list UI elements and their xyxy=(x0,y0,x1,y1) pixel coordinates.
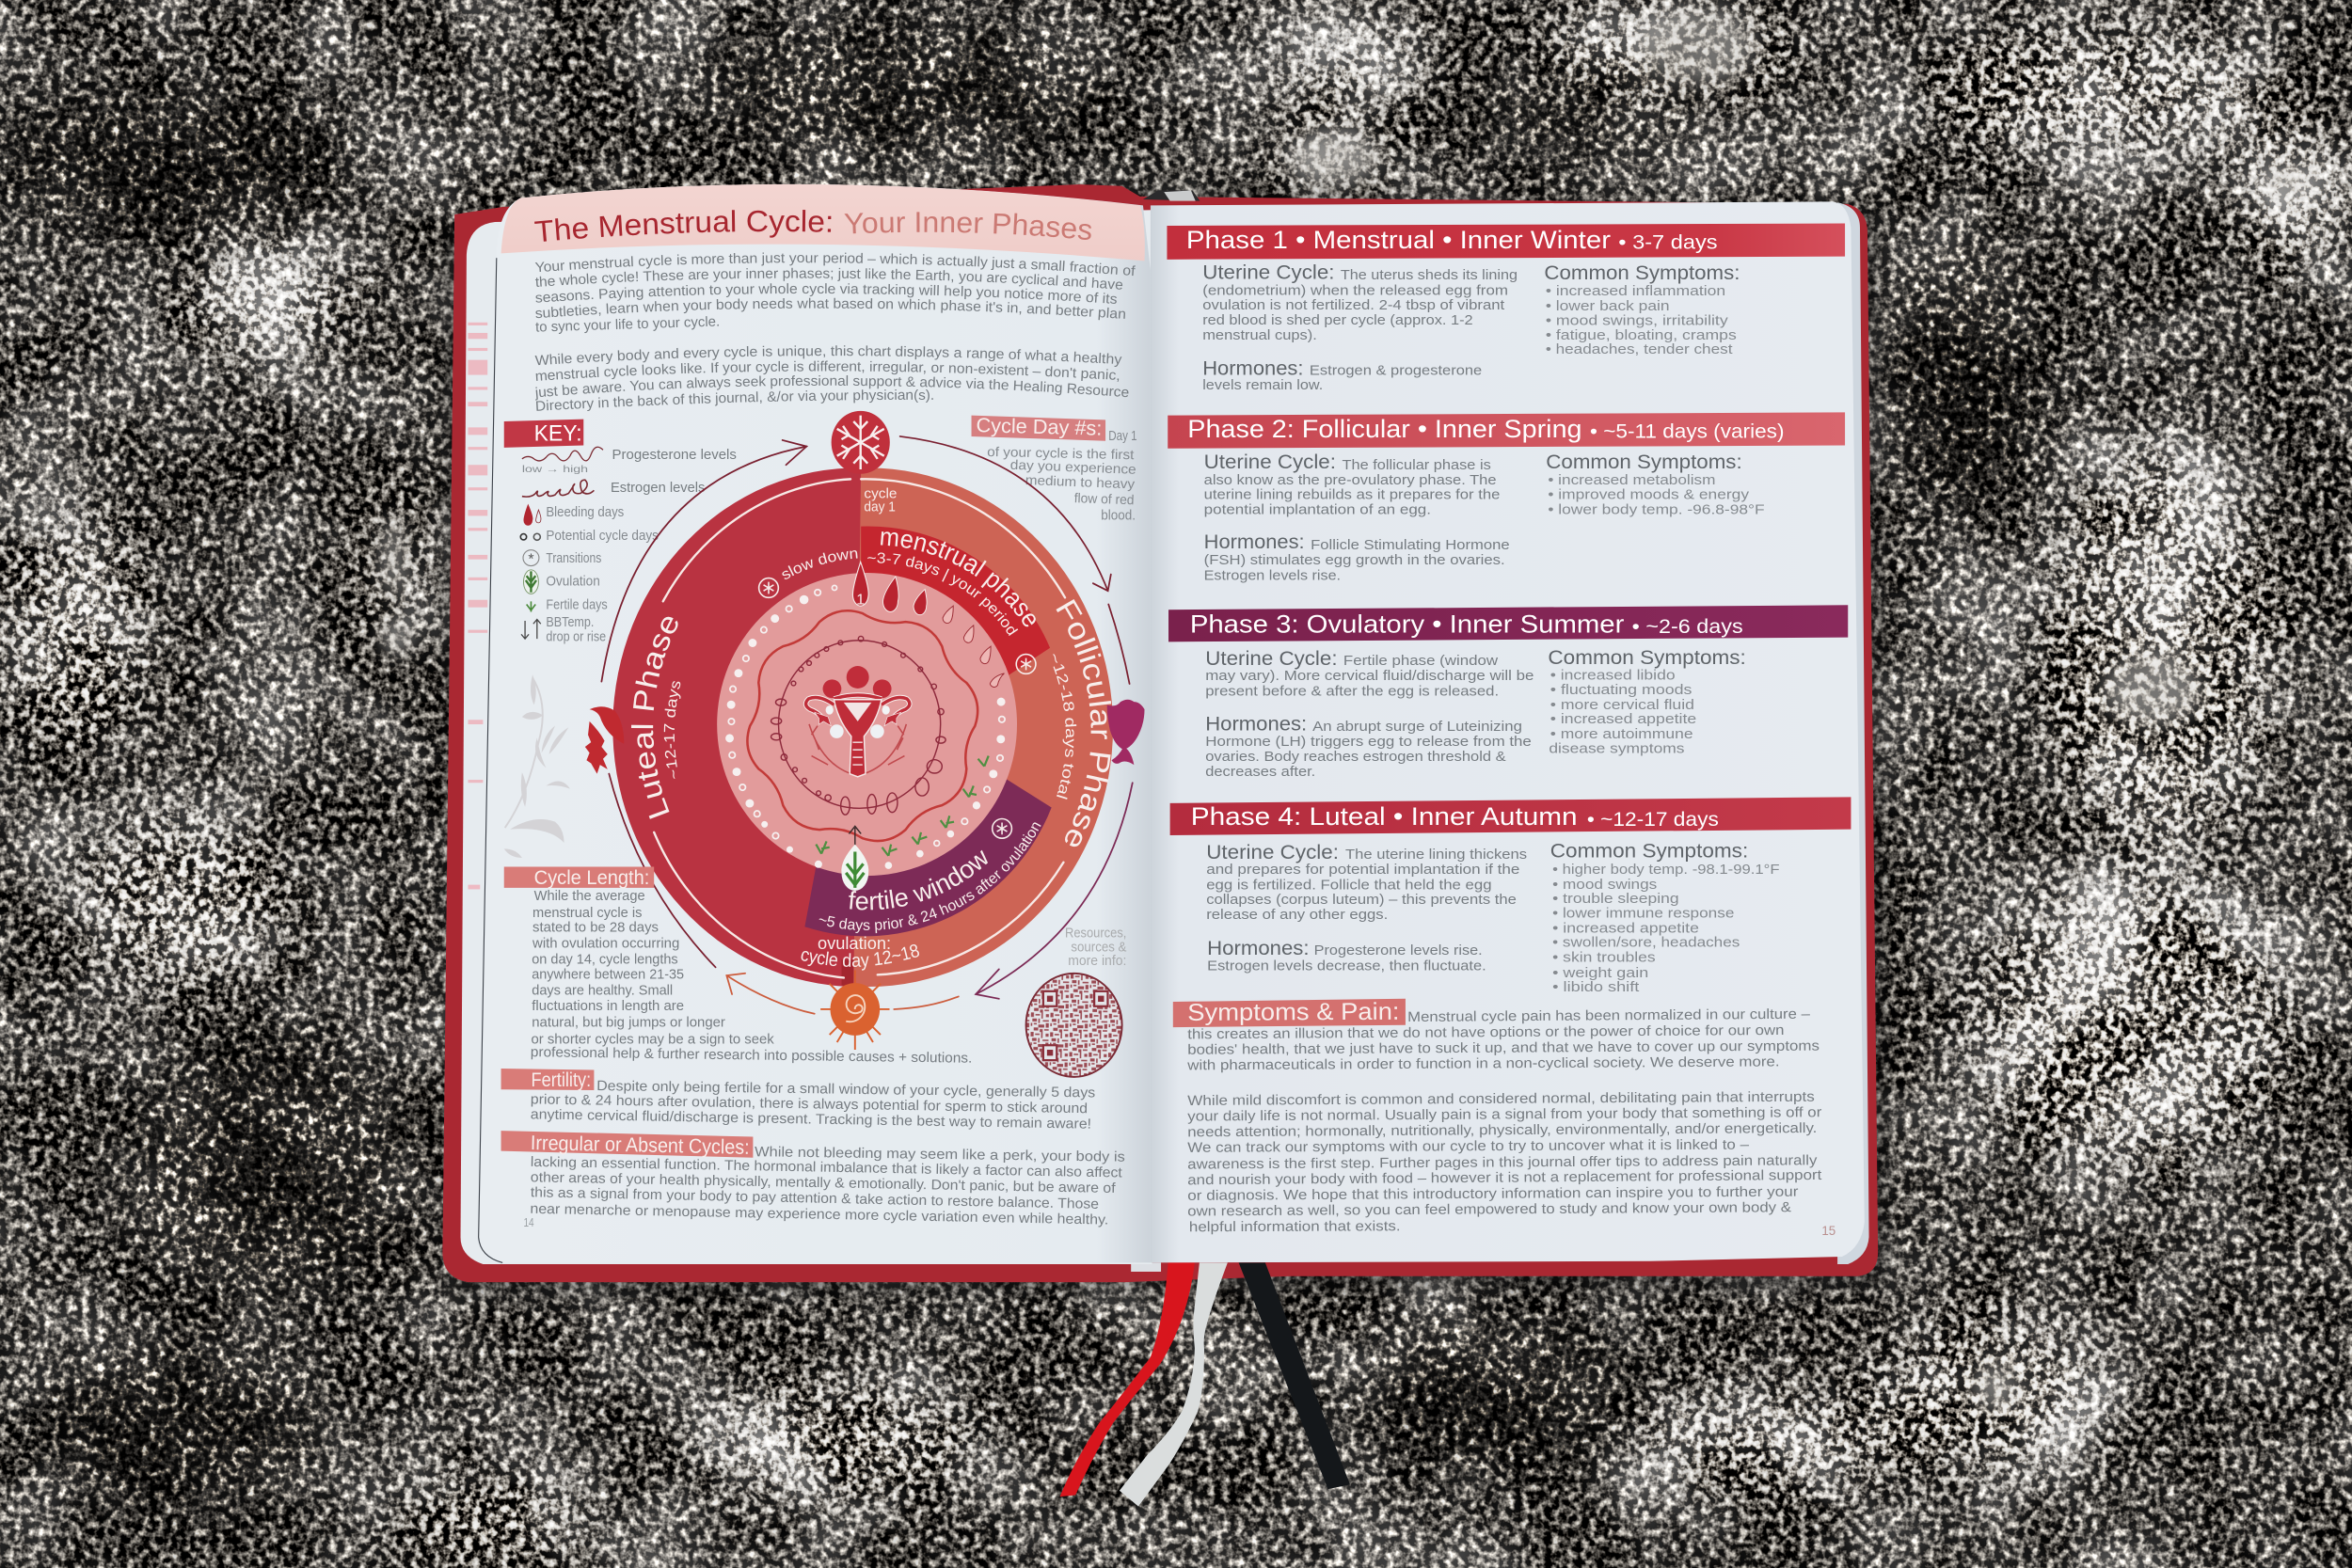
fertile window band xyxy=(804,760,1052,936)
cycle day dots xyxy=(725,585,1006,869)
phase 1 uterine cycle: (endometrium) when the released egg from xyxy=(1202,282,1508,298)
resources note: Resources, xyxy=(1065,926,1126,941)
phase 4 symptoms: • weight gain xyxy=(1552,966,1648,981)
phase 4 block xyxy=(1170,797,1851,995)
fertile sprouts xyxy=(816,756,989,856)
phase 4 heading: • ~12-17 days xyxy=(1587,808,1719,831)
phase 2 symptoms: • increased metabolism xyxy=(1548,473,1715,488)
phase 2 hormones: (FSH) stimulates egg growth in the ovaries. xyxy=(1204,552,1505,568)
icon: snowflake xyxy=(832,411,890,474)
page number 15: 15 xyxy=(1821,1224,1836,1238)
phase 4 symptoms: • skin troubles xyxy=(1552,950,1656,965)
phase 1 uterine cycle: The uterus sheds its lining xyxy=(1341,267,1518,283)
phase 4 uterine cycle: egg is fertilized. Follicle that held the egg xyxy=(1206,877,1492,893)
phase 3 symptoms: disease symptoms xyxy=(1549,741,1684,756)
phase 4 uterine cycle: Uterine Cycle: xyxy=(1206,840,1339,863)
intro paragraph one: to sync your life to your cycle. xyxy=(535,316,719,334)
phase 1 heading xyxy=(1167,224,1845,260)
key: basal body temperature: drop or rise xyxy=(546,630,606,645)
luteal disc half xyxy=(612,467,861,987)
fertility heading: Fertility: xyxy=(531,1069,591,1091)
intro paragraph one: subtleties, learn when your body needs what based on which phase it's in, and better plan xyxy=(536,297,1125,320)
uterus body xyxy=(834,700,882,777)
phase 3 symptoms xyxy=(1548,645,1746,756)
phase 2 hormones: Estrogen levels rise. xyxy=(1204,568,1341,584)
menstrual band xyxy=(861,526,1050,697)
phase 2 symptoms: • improved moods & energy xyxy=(1548,488,1750,503)
phase 4 symptoms: • trouble sleeping xyxy=(1552,892,1679,907)
phase 3 symptoms: • more autoimmune xyxy=(1550,727,1693,742)
irregular or absent cycles block xyxy=(501,1131,1125,1228)
phase 2 hormones: Hormones: xyxy=(1204,530,1305,553)
QR code xyxy=(1026,974,1122,1077)
phase 1 symptoms: • lower back pain xyxy=(1546,299,1670,314)
panel: right page xyxy=(1151,201,1865,1262)
book shadow xyxy=(447,192,1887,1292)
key: progesterone: Progesterone levels xyxy=(612,447,737,463)
menstrual phase label: ~3-7 days | your period xyxy=(866,550,1020,639)
phase 1 symptoms: • mood swings, irritability xyxy=(1546,313,1729,328)
resources note: sources & xyxy=(1071,941,1127,956)
menstrual phase label: menstrual phase xyxy=(879,521,1046,632)
ovulation egg xyxy=(841,845,868,891)
page number 14: 14 xyxy=(523,1215,534,1229)
key: bleeding days: Bleeding days xyxy=(546,505,624,520)
phase 2 hormones: Follicle Stimulating Hormone xyxy=(1311,537,1510,553)
phase 1 uterine cycle: red blood is shed per cycle (approx. 1-2 xyxy=(1202,312,1473,328)
phase 4 symptoms: • swollen/sore, headaches xyxy=(1552,935,1740,950)
phase 4 symptoms: • increased appetite xyxy=(1552,921,1699,936)
key: potential cycle days: Potential cycle days xyxy=(546,529,659,544)
phase 3 symptoms: Common Symptoms: xyxy=(1548,645,1746,669)
phase 3 symptoms: • more cervical fluid xyxy=(1550,698,1694,713)
intro paragraph one: Your menstrual cycle is more than just your period – which is actually just a small fraction of xyxy=(534,252,1136,277)
fertility block xyxy=(501,1069,1095,1132)
phase 4 hormones: Estrogen levels decrease, then fluctuate. xyxy=(1207,958,1486,974)
phase 4 symptoms: • higher body temp. -98.1-99.1°F xyxy=(1552,863,1780,878)
cycle day callout xyxy=(972,414,1137,523)
book cover xyxy=(442,184,1878,1282)
phase 4 heading: Phase 4: Luteal • Inner Autumn xyxy=(1191,801,1578,831)
fertile window label: ~5 days prior & 24 hours after ovulation xyxy=(817,818,1045,934)
phase 3 hormones xyxy=(1205,711,1532,780)
key: fertile days: Fertile days xyxy=(546,597,608,612)
white chalk arcs xyxy=(654,479,1065,977)
phase 2 block xyxy=(1168,412,1845,584)
ribbon: red xyxy=(1060,1262,1195,1497)
phase 4 uterine cycle: collapses (corpus luteum) – this prevents the xyxy=(1206,892,1517,908)
phase 2 symptoms xyxy=(1546,450,1765,518)
phase 2 uterine cycle: potential implantation of an egg. xyxy=(1204,502,1431,518)
phase 1 symptoms: • headaches, tender chest xyxy=(1546,342,1733,357)
fertility text: Despite only being fertile for a small window of your cycle, generally 5 days xyxy=(596,1078,1095,1101)
phase 4 hormones: Hormones: xyxy=(1207,936,1310,959)
fertility text: prior to & 24 hours after ovulation, there is always potential for sperm to stick around xyxy=(531,1091,1088,1117)
symptoms paragraph two xyxy=(1187,1089,1822,1235)
phase 1 hormones xyxy=(1202,356,1482,393)
intro paragraph two: Directory in the back of this journal, &/or via your physician(s). xyxy=(535,388,934,415)
phase 4 symptoms: • libido shift xyxy=(1552,980,1639,995)
page edge line xyxy=(479,258,502,1262)
phase 2 uterine cycle xyxy=(1204,450,1500,518)
cycle length text: or shorter cycles may be a sign to seek xyxy=(531,1031,774,1047)
key xyxy=(504,420,737,645)
white nub xyxy=(1131,1262,1161,1272)
phase 1 uterine cycle: Uterine Cycle: xyxy=(1202,261,1335,284)
cycle wheel chart xyxy=(585,411,1145,1050)
resources note xyxy=(1065,926,1127,969)
left page stack xyxy=(461,210,1152,1264)
symptoms heading: Symptoms & Pain: xyxy=(1187,999,1400,1026)
panel: left page xyxy=(479,184,1151,1262)
panel: left page content xyxy=(501,204,1145,1229)
key heading: KEY: xyxy=(534,421,582,447)
uterine lining wavy ring xyxy=(747,610,977,841)
cycle day text: flow of red xyxy=(1073,491,1135,508)
symptoms paragraph two: needs attention; hormonally, nutritionally, physically, environmentally, and/or energetically. xyxy=(1187,1120,1817,1140)
cycle length text: natural, but big jumps or longer xyxy=(532,1015,725,1031)
spine top detail xyxy=(1143,190,1200,201)
ribbons xyxy=(1060,1262,1350,1506)
phase 2 uterine cycle: uterine lining rebuilds as it prepares for the xyxy=(1204,486,1500,502)
cycle length text: professional help & further research into possible causes + solutions. xyxy=(531,1044,972,1067)
intro paragraph one: seasons. Paying attention to your whole cycle via tracking will help you notice more of its xyxy=(536,283,1117,304)
title band xyxy=(501,184,1145,261)
phase 3 hormones: An abrupt surge of Luteinizing xyxy=(1312,719,1522,735)
phase 1 heading: Phase 1 • Menstrual • Inner Winter xyxy=(1186,225,1611,254)
cycle day heading: Cycle Day #s: xyxy=(976,414,1103,440)
cycle length text: with ovulation occurring xyxy=(532,935,679,951)
phase 4 symptoms xyxy=(1550,838,1780,995)
key: progesterone: low → high xyxy=(522,465,588,475)
cycle length text: days are healthy. Small xyxy=(532,982,673,998)
follicular phase label: Follicular Phase xyxy=(1049,594,1119,855)
fertility text xyxy=(531,1078,1095,1132)
laurel branches xyxy=(809,724,906,774)
phase 1 hormones: levels remain low. xyxy=(1202,377,1323,393)
cycle day one label xyxy=(864,485,897,515)
ovulation arrow xyxy=(849,826,861,848)
ribbon: white xyxy=(1120,1262,1228,1506)
panel: right page content xyxy=(1167,224,1851,1238)
follicular disc half xyxy=(624,467,1113,987)
left page tabs xyxy=(468,323,487,889)
phase 2 hormones xyxy=(1204,530,1510,584)
key: basal body temperature xyxy=(521,615,606,645)
cycle day one label: cycle xyxy=(864,485,897,501)
luteal phase label: ~12-17 days xyxy=(662,679,685,781)
phase 1 hormones: Estrogen & progesterone xyxy=(1310,362,1482,378)
phase 4 hormones xyxy=(1207,936,1486,974)
phase 3 symptoms: • increased libido xyxy=(1550,669,1676,684)
phase 4 symptoms: • lower immune response xyxy=(1552,906,1734,921)
follicular phase label: ~12-18 days total xyxy=(1045,651,1078,801)
bleeding drops: 1 xyxy=(856,593,865,609)
phase 3 uterine cycle: may vary). More cervical fluid/discharge will be xyxy=(1205,668,1534,684)
phase 3 heading: Phase 3: Ovulatory • Inner Summer xyxy=(1190,610,1624,639)
cycle length text: menstrual cycle is xyxy=(532,905,642,921)
phase 2 uterine cycle: also know as the pre-ovulatory phase. The xyxy=(1204,472,1497,488)
irregular cycles text: near menarche or menopause may experience more cycle variation even while healthy. xyxy=(530,1201,1108,1228)
phase 3 hormones: decreases after. xyxy=(1205,764,1315,780)
phase 3 heading: • ~2-6 days xyxy=(1632,615,1743,638)
symptoms paragraph two: and nourish your body with food – however it is not a replacement for professional support xyxy=(1187,1167,1822,1188)
irregular cycles heading: Irregular or Absent Cycles: xyxy=(531,1132,750,1159)
phase 1 uterine cycle: menstrual cups). xyxy=(1202,327,1317,343)
intro paragraph one: the whole cycle! These are your inner phases; just like the Earth, you are cyclical and have xyxy=(535,267,1123,290)
symptoms paragraph one: with pharmaceuticals in order to function in a non-cyclical society. We deserve more. xyxy=(1186,1053,1780,1073)
cycle day text: Day 1 xyxy=(1108,429,1137,444)
phase 4 symptoms: Common Symptoms: xyxy=(1550,838,1748,862)
intro paragraph two xyxy=(533,343,1130,415)
cycle length text xyxy=(531,888,972,1067)
moon phases xyxy=(823,666,892,698)
phase 3 symptoms: • increased appetite xyxy=(1550,712,1696,727)
key heading xyxy=(504,420,583,448)
symptoms paragraph two: While mild discomfort is common and considered normal, debilitating pain that interrupts xyxy=(1187,1089,1815,1109)
decorative plant xyxy=(504,674,570,858)
phase 4 uterine cycle xyxy=(1206,840,1527,923)
cycle day text: of your cycle is the first xyxy=(987,445,1135,463)
phase 1 symptoms xyxy=(1544,261,1740,357)
cycle day text: medium to heavy xyxy=(1025,473,1136,492)
book xyxy=(442,184,1887,1506)
icon: autumn leaves xyxy=(585,706,624,774)
irregular cycles text: other areas of your health physically, mentally & emotionally. Don't panic, but be aware of xyxy=(531,1169,1117,1196)
ovaries xyxy=(830,724,884,738)
cycle day text: day you experience xyxy=(1010,458,1136,478)
phase 4 heading xyxy=(1170,797,1851,835)
phase 2 heading xyxy=(1168,412,1845,449)
ovulation label: cycle day 12~18 xyxy=(799,941,922,972)
outer cycle arrows xyxy=(601,436,1133,1014)
symptoms paragraph two: helpful information that exists. xyxy=(1189,1218,1401,1235)
key: fertile days xyxy=(527,597,608,612)
phase 4 uterine cycle: release of any other eggs. xyxy=(1206,907,1388,923)
phase 2 heading: • ~5-11 days (varies) xyxy=(1590,420,1784,443)
cycle length text: fluctuations in length are xyxy=(532,998,684,1014)
inner pale disc xyxy=(717,573,1017,876)
phase 1 hormones: Hormones: xyxy=(1202,356,1304,379)
fimbriae xyxy=(815,712,901,726)
slow down label: slow down xyxy=(779,546,859,583)
irregular cycles text: lacking an essential function. The hormonal imbalance that is likely a factor can also affect xyxy=(531,1154,1123,1181)
intro paragraph two: just be aware. You can always seek professional support & advice via the Healing Resource xyxy=(535,375,1129,401)
key: basal body temperature: BBTemp. xyxy=(546,615,594,630)
hormone loop ring xyxy=(771,636,946,815)
key: transitions: * xyxy=(528,551,534,567)
phase 3 hormones: ovaries. Body reaches estrogen threshold & xyxy=(1205,749,1506,765)
symptoms paragraph two: awareness is the first step. Further pages in this journal offer tips to address pain naturally xyxy=(1187,1152,1818,1173)
phase 4 uterine cycle: and prepares for potential implantation if the xyxy=(1206,862,1519,878)
luteal phase label: Luteal Phase xyxy=(626,608,687,824)
symptoms paragraph one: Menstrual cycle pain has been normalized in our culture – xyxy=(1407,1006,1811,1025)
symptoms paragraph two: your daily life is not normal. Usually pain is a signal from your body that something is off or xyxy=(1187,1104,1821,1125)
symptoms paragraph one xyxy=(1186,1006,1820,1073)
irregular cycles text xyxy=(530,1144,1125,1228)
phase 3 hormones: Hormones: xyxy=(1205,711,1307,735)
cycle length text: on day 14, cycle lengths xyxy=(532,951,678,967)
phase 3 hormones: Hormone (LH) triggers egg to release from the xyxy=(1205,734,1532,750)
phase 4 symptoms: • mood swings xyxy=(1552,878,1657,893)
fertility heading xyxy=(501,1069,594,1091)
cycle length text: stated to be 28 days xyxy=(532,920,659,936)
phase 1 uterine cycle xyxy=(1202,261,1518,343)
phase 4 hormones: Progesterone levels rise. xyxy=(1314,942,1483,958)
phase 2 symptoms: Common Symptoms: xyxy=(1546,450,1742,473)
fallopian tubes xyxy=(806,695,910,721)
symptoms paragraph two: own research as well, so you can feel empowered to study and know your own body & xyxy=(1187,1199,1791,1219)
intro paragraph two: menstrual cycle looks like. If your cycle is different, irregular, or non-existent – don't panic, xyxy=(536,361,1120,382)
phase 3 heading xyxy=(1168,605,1848,641)
phase 2 uterine cycle: The follicular phase is xyxy=(1342,457,1491,473)
key: progesterone xyxy=(522,447,737,475)
bleeding drops xyxy=(852,562,1004,687)
symptoms paragraph one: this creates an illusion that we do not have options or the power of choice for our own xyxy=(1187,1022,1785,1042)
cycle length text: anywhere between 21-35 xyxy=(532,967,684,983)
phase 1 symptoms: • fatigue, bloating, cramps xyxy=(1546,328,1737,343)
symptoms paragraph two: We can track our symptoms with our cycle to try to uncover what it is linked to – xyxy=(1187,1137,1750,1156)
uterus icon xyxy=(806,666,910,777)
cycle day text: blood. xyxy=(1101,508,1136,523)
phase 3 uterine cycle: Fertile phase (window xyxy=(1343,653,1498,669)
ribbon: black xyxy=(1239,1262,1350,1489)
phase 2 uterine cycle: Uterine Cycle: xyxy=(1204,450,1336,473)
phase 2 heading: Phase 2: Follicular • Inner Spring xyxy=(1187,414,1582,443)
key: bleeding days xyxy=(523,504,624,526)
title: The Menstrual Cycle: xyxy=(534,210,832,242)
phase 1 symptoms: Common Symptoms: xyxy=(1544,261,1740,284)
symptoms paragraph two: or diagnosis. We hope that this introductory information can inspire you to further your xyxy=(1187,1184,1798,1204)
key: transitions xyxy=(523,550,601,567)
cycle length heading: Cycle Length: xyxy=(534,866,649,889)
intro paragraph two: While every body and every cycle is unique, this chart displays a range of what a healthy xyxy=(534,345,1121,367)
cycle length block xyxy=(504,866,972,1067)
phase 1 uterine cycle: ovulation is not fertilized. 2-4 tbsp of vibrant xyxy=(1202,297,1505,313)
title xyxy=(533,204,1094,248)
transition icons xyxy=(759,578,1036,838)
right page stack xyxy=(1837,202,1869,1264)
phase 3 symptoms: • fluctuating moods xyxy=(1550,683,1692,698)
key: transitions: Transitions xyxy=(546,551,601,566)
irregular cycles text: While not bleeding may seem like a perk, your body is xyxy=(755,1144,1125,1165)
phase 2 symptoms: • lower body temp. -96.8-98°F xyxy=(1548,503,1765,518)
icon: sun xyxy=(820,971,889,1050)
fertility text: anytime cervical fluid/discharge is present. Tracking is the best way to remain aware! xyxy=(531,1106,1091,1132)
cycle length text: While the average xyxy=(534,888,645,904)
key: ovulation: Ovulation xyxy=(546,575,600,590)
symptoms and pain block xyxy=(1173,999,1822,1235)
phase 3 uterine cycle: present before & after the egg is released. xyxy=(1205,683,1499,699)
phase 1 heading: • 3-7 days xyxy=(1618,231,1718,254)
phase 4 uterine cycle: The uterine lining thickens xyxy=(1345,847,1527,863)
key: estrogen: Estrogen levels xyxy=(611,480,705,496)
cycle day one label: day 1 xyxy=(864,499,896,515)
cycle day text xyxy=(987,429,1137,523)
phase 1 symptoms: • increased inflammation xyxy=(1546,284,1725,299)
phase 3 uterine cycle xyxy=(1205,646,1534,699)
phase 1 block xyxy=(1167,224,1845,393)
key: estrogen xyxy=(522,480,705,497)
ovulation label: ovulation: xyxy=(818,933,891,953)
title: Your Inner Phases xyxy=(845,212,1091,240)
symptoms paragraph one: bodies' health, that we just have to suck it up, and that we have to cover up our symptoms xyxy=(1187,1038,1820,1058)
phase 3 block xyxy=(1168,605,1848,780)
key: ovulation xyxy=(523,570,600,594)
irregular cycles text: this as a signal from your body to pay attention & take action to restore balance. Those xyxy=(531,1184,1099,1212)
intro paragraph one xyxy=(534,250,1136,336)
fertile window label: fertile window xyxy=(847,842,994,915)
phase 3 uterine cycle: Uterine Cycle: xyxy=(1205,646,1338,670)
icon: rose xyxy=(1107,700,1145,765)
resources note: more info: xyxy=(1068,954,1126,969)
